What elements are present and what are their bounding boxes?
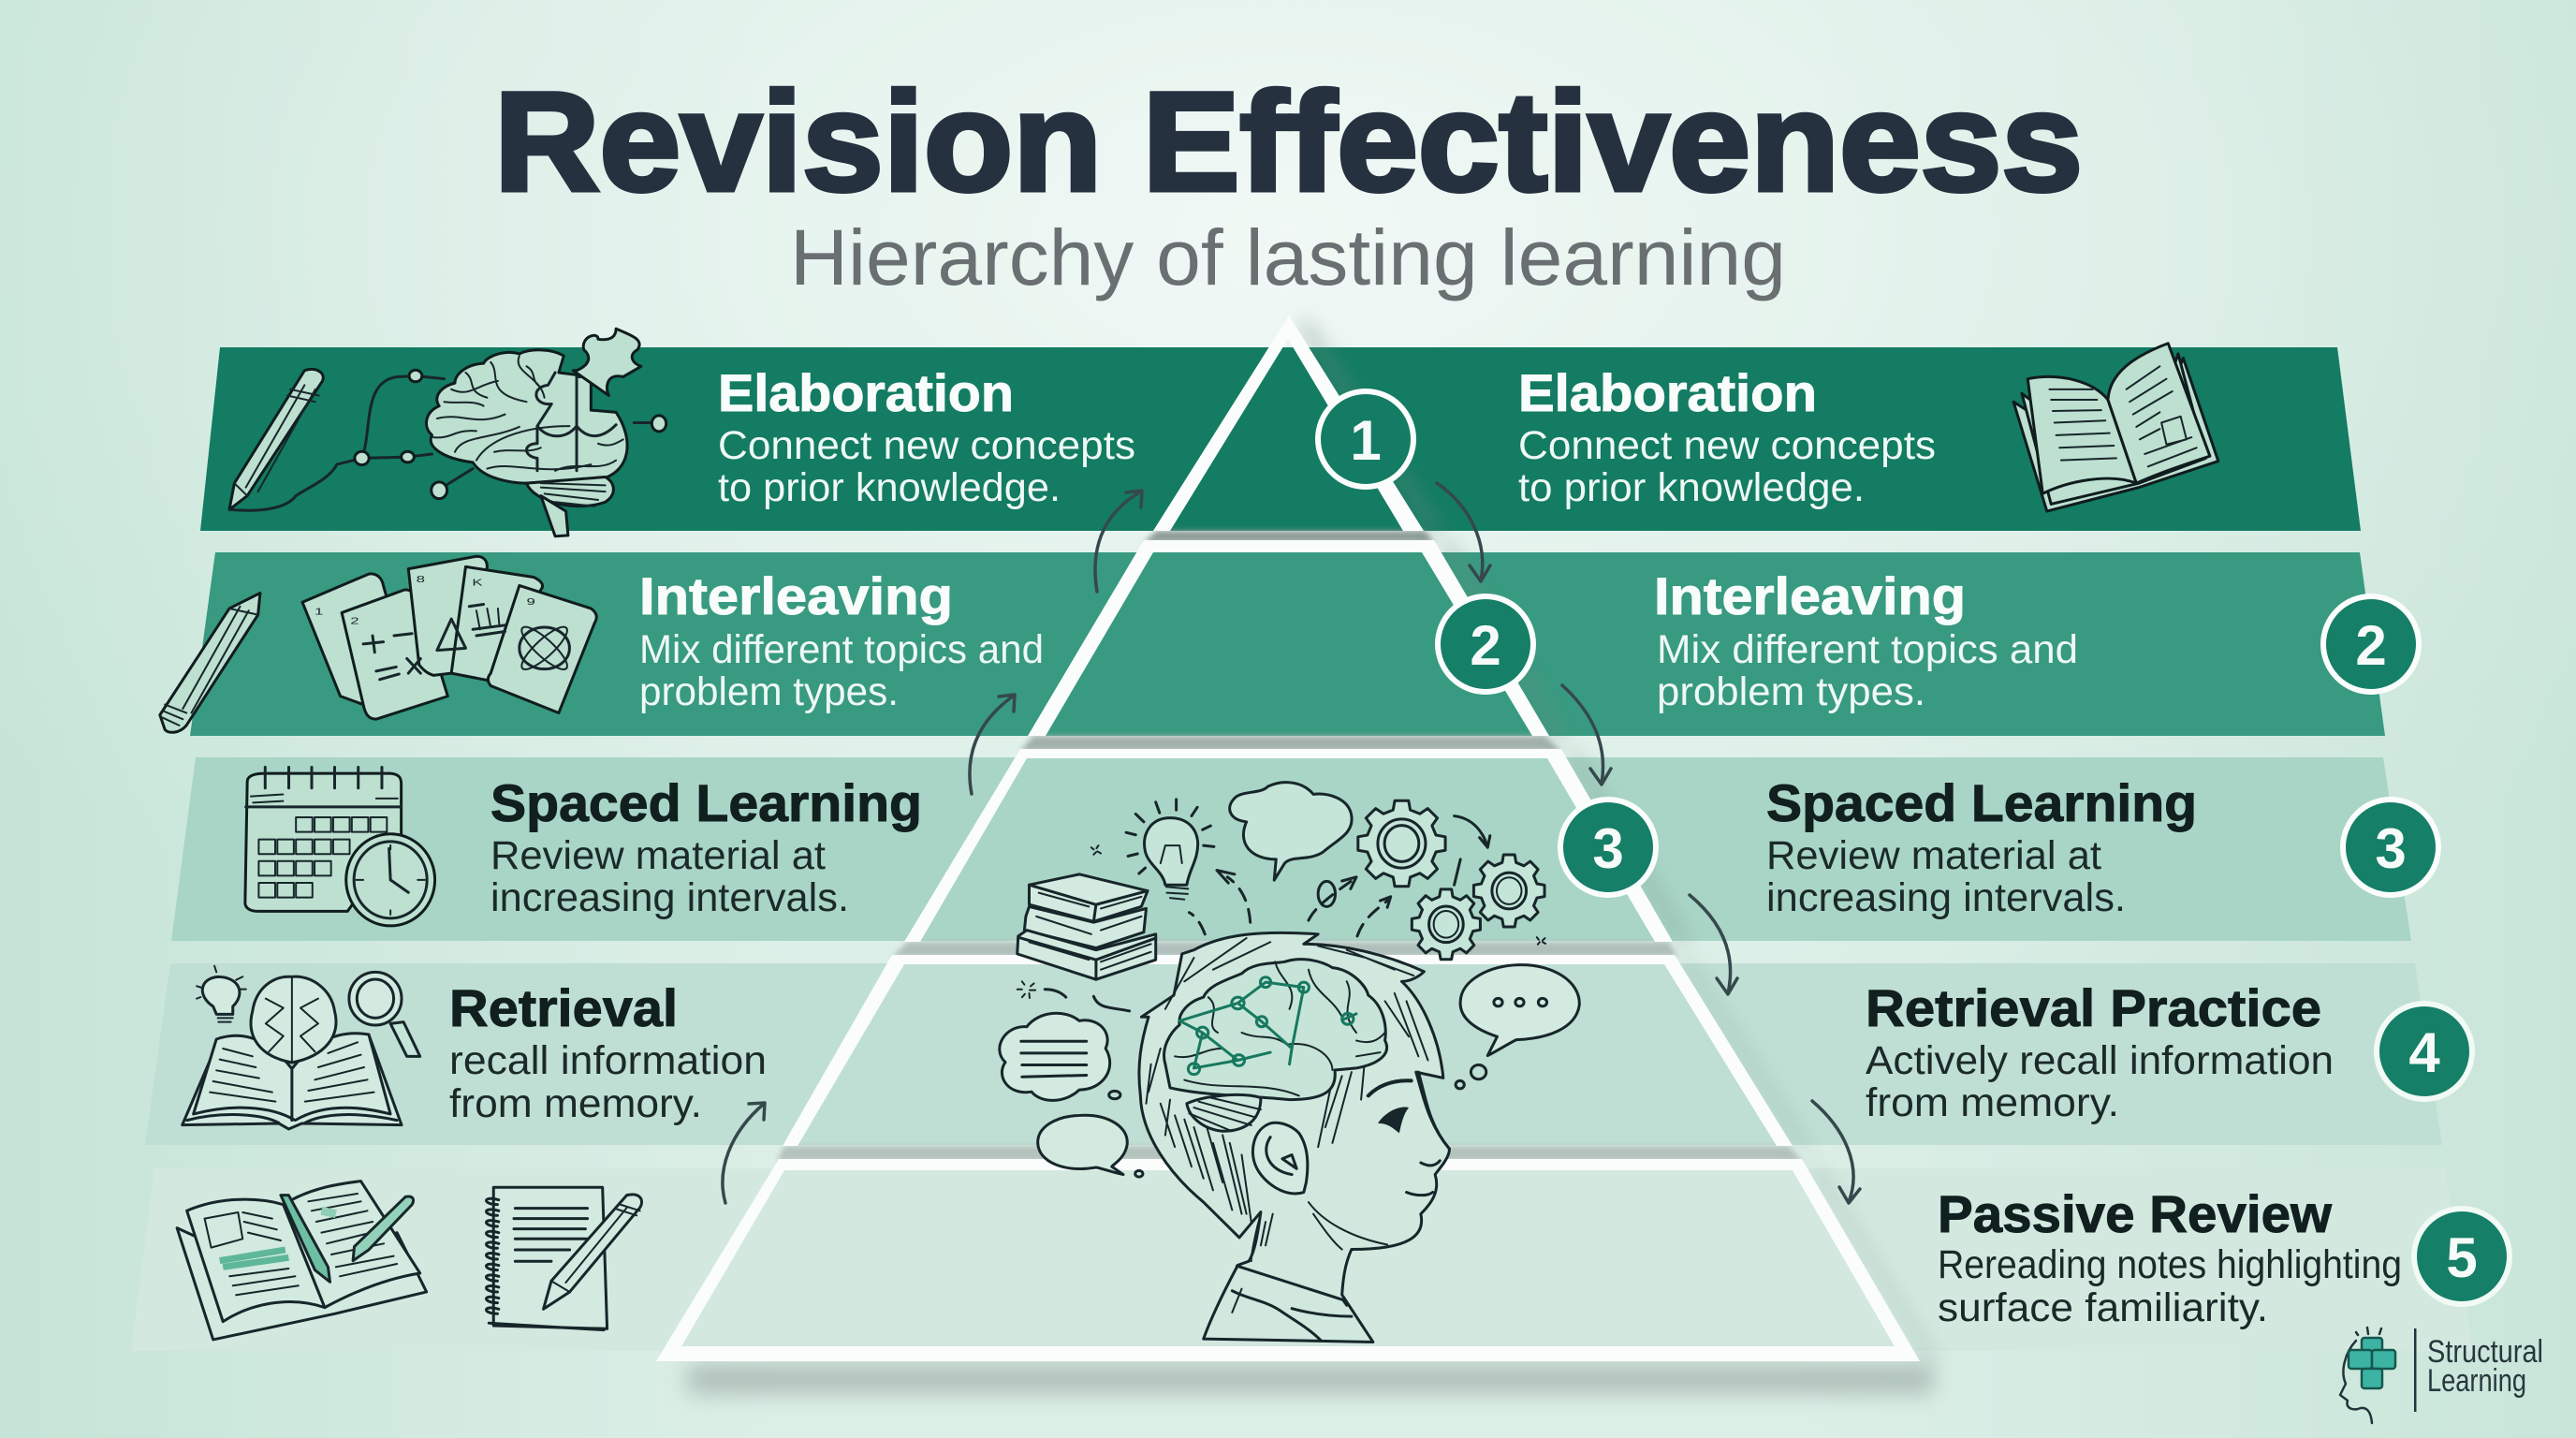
text: Elaboration left: Elaboration xyxy=(718,363,1014,422)
icon: gears xyxy=(1358,800,1544,960)
icon: open book with highlighter xyxy=(177,1181,427,1340)
logo divider xyxy=(2414,1328,2417,1412)
text: Elaboration right xyxy=(1518,363,1936,510)
icon: light bulb xyxy=(1091,800,1545,945)
arrow: Elaboration to 2 xyxy=(1437,483,1490,581)
pyramid frame xyxy=(656,315,1920,1361)
logo rays xyxy=(2356,1328,2381,1335)
subtitle: Hierarchy of lasting learning xyxy=(790,213,1786,301)
arrow: Spaced Learning to 4 xyxy=(1690,895,1737,994)
icon: flash cards xyxy=(302,556,596,719)
text: Interleaving left: Interleaving xyxy=(639,566,953,625)
icon: book stack xyxy=(1017,874,1156,979)
text: Interleaving right xyxy=(1654,566,2078,714)
text: Elaboration left xyxy=(718,363,1135,510)
logo: Structural Learning xyxy=(2340,1328,2543,1423)
icon: pencil xyxy=(160,593,260,732)
badge 4 xyxy=(2377,1004,2472,1099)
icon: flash cards: 2 xyxy=(350,616,359,626)
text: Retrieval left: from memory. xyxy=(449,1081,702,1126)
logo wordmark: Learning xyxy=(2427,1363,2526,1399)
text: Spaced Learning left xyxy=(490,773,922,920)
arrow: flow up to Retrieval xyxy=(723,1103,765,1203)
text: Retrieval left xyxy=(449,978,767,1126)
icon: flash cards: 9 xyxy=(526,596,535,607)
text: Spaced Learning right xyxy=(1766,773,2197,920)
text: Spaced Learning left: Spaced Learning xyxy=(490,773,922,832)
text: Interleaving left xyxy=(639,566,1044,714)
text: Retrieval Practice right xyxy=(1866,978,2334,1125)
brain in head xyxy=(1164,960,1387,1131)
text: Interleaving left: Mix different topics and xyxy=(639,627,1044,672)
text: Spaced Learning right: increasing intervals. xyxy=(1766,875,2126,920)
tier bands xyxy=(131,347,2473,1351)
logo cross xyxy=(2349,1338,2395,1388)
icon: brain with puzzle pieces xyxy=(427,329,641,536)
text: Elaboration left: to prior knowledge. xyxy=(718,465,1061,510)
text: Retrieval Practice right: Actively recall information xyxy=(1866,1038,2334,1083)
text: Interleaving right: problem types. xyxy=(1657,669,1925,714)
badge 3 pyramid: 3 xyxy=(1592,817,1624,880)
icon: pencil and circuit xyxy=(229,369,666,510)
badge 1 xyxy=(1318,391,1413,487)
badge 2 right xyxy=(2323,596,2419,692)
badge 2 pyramid xyxy=(1438,596,1533,692)
badge 1: 1 xyxy=(1350,409,1382,472)
badge 3 right xyxy=(2343,800,2438,895)
logo wordmark: Structural xyxy=(2427,1334,2543,1370)
logo head outline xyxy=(2340,1341,2372,1423)
text: Elaboration right: Connect new concepts xyxy=(1518,423,1936,468)
icon: book, brain, bulb and magnifier xyxy=(183,966,420,1129)
icon: small speech bubble xyxy=(1038,1115,1143,1177)
text: Elaboration right: Elaboration xyxy=(1518,363,1817,422)
badge 5 xyxy=(2414,1209,2510,1304)
badge 2 pyramid: 2 xyxy=(1470,614,1501,677)
text: Retrieval left: recall information xyxy=(449,1038,767,1083)
head and hair xyxy=(1139,932,1449,1342)
badge 3 pyramid xyxy=(1560,800,1656,895)
icon: idea arrows xyxy=(1189,877,1387,936)
text: Interleaving right: Interleaving xyxy=(1654,566,1966,625)
icon: note cloud xyxy=(1000,981,1130,1100)
arrow: Retrieval to 5 xyxy=(1812,1101,1860,1203)
arrow: Interleaving to 3 xyxy=(1562,685,1611,785)
text: Spaced Learning left: Review material at xyxy=(490,833,826,878)
illustration: boy with ideas xyxy=(1000,783,1579,1342)
text: Passive Review right: Passive Review xyxy=(1938,1184,2332,1243)
text: Passive Review right: surface familiarity. xyxy=(1938,1285,2268,1330)
text: Retrieval Practice right: Retrieval Practice xyxy=(1866,978,2321,1037)
text: Spaced Learning left: increasing intervals. xyxy=(490,875,849,920)
icon: flash cards: 1 xyxy=(315,607,323,617)
text: Spaced Learning right: Spaced Learning xyxy=(1766,773,2197,832)
icon: flash cards: K xyxy=(472,578,484,588)
icon: calendar and clock xyxy=(245,767,435,926)
badge 5: 5 xyxy=(2446,1226,2478,1289)
text: Interleaving left: problem types. xyxy=(639,669,899,714)
logo wordmark xyxy=(2427,1334,2543,1399)
icon: notebook and pencil xyxy=(487,1187,642,1330)
text: Interleaving right: Mix different topics and xyxy=(1657,627,2078,672)
arrow: flow up to Elaboration xyxy=(1095,491,1142,592)
text: Retrieval left: Retrieval xyxy=(449,978,678,1037)
badge 4: 4 xyxy=(2408,1021,2440,1084)
text: Passive Review right xyxy=(1938,1184,2402,1330)
title: Revision Effectiveness xyxy=(494,63,2083,220)
icon: open book xyxy=(2013,344,2218,511)
text: Elaboration left: Connect new concepts xyxy=(718,423,1135,468)
icon: thought cloud xyxy=(1230,783,1352,880)
text: Retrieval Practice right: from memory. xyxy=(1866,1080,2119,1125)
icon: speech bubble with dots xyxy=(1456,965,1579,1089)
icon: arrow heads xyxy=(1217,816,1490,907)
arrow: flow up to Interleaving xyxy=(970,695,1015,794)
badge 2 right: 2 xyxy=(2355,614,2387,677)
icon: flash cards: 8 xyxy=(417,574,425,584)
text: Elaboration right: to prior knowledge. xyxy=(1518,465,1865,510)
text: Spaced Learning right: Review material at xyxy=(1766,833,2101,878)
pyramid shadows xyxy=(688,323,1934,1393)
badge 3 right: 3 xyxy=(2375,817,2407,880)
text: Passive Review right: Rereading notes highlighting xyxy=(1938,1242,2402,1287)
